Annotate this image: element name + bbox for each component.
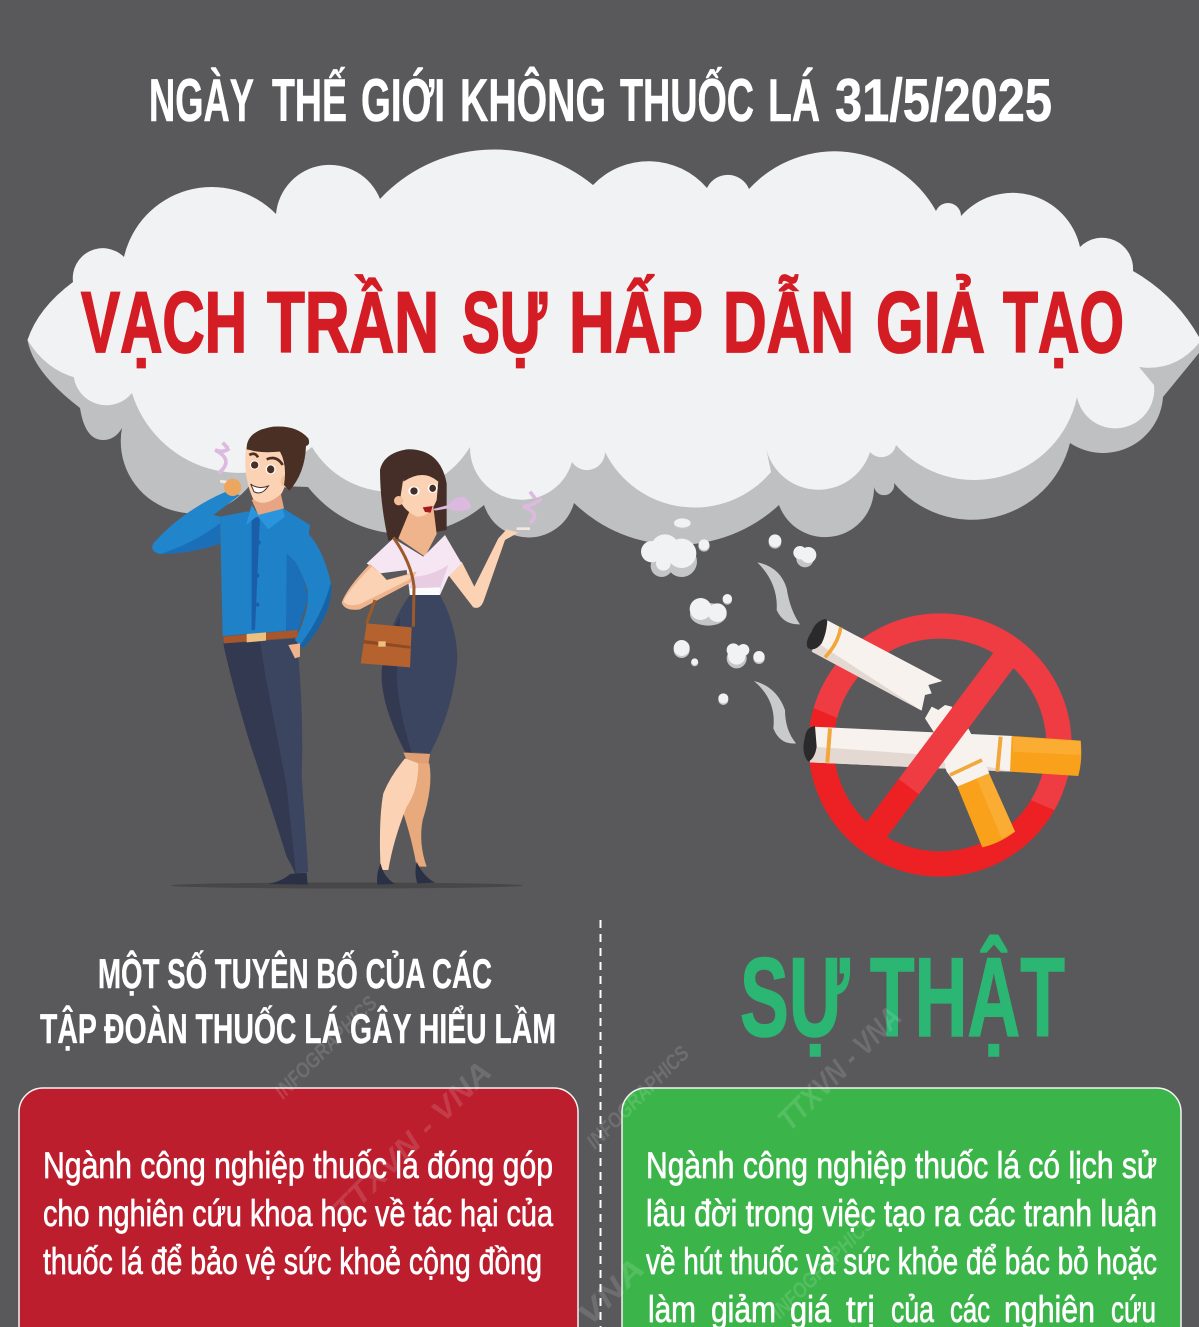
long cigarette [803,726,1081,776]
title: THUỐC [620,67,754,134]
watermarks: TTXVN - VNA [327,1055,498,1227]
left heading: MỘT SỐ TUYÊN BỐ CỦA CÁC [98,949,492,997]
main heading: GIẢ [876,275,985,371]
broken cigarette [807,619,942,711]
divider [600,920,602,1327]
smoke puffs [641,518,816,705]
third cigarette top [925,705,970,770]
left heading: TẬP ĐOÀN THUỐC LÁ GÂY HIỂU LẦM [40,1004,556,1052]
title: KHÔNG [460,67,606,134]
ground shadow [171,882,523,888]
watermarks: INFOGRAPHICS [270,992,382,1104]
panel: misleading claim [19,1088,578,1327]
panel: the truth [622,1088,1181,1327]
title: LÁ [768,67,820,134]
icon: no smoking ring [821,626,1059,864]
watermarks: TTXVN - VNA [772,1000,908,1137]
watermarks: INFOGRAPHICS [767,1212,879,1324]
main heading: TRẦN [267,275,439,371]
main heading: HẤP [569,275,703,371]
panel: misleading claim: cho nghiên cứu khoa học về tác hại của [43,1193,553,1234]
left heading [40,949,556,1052]
main heading: TẠO [1003,275,1124,371]
title: 31/5/2025 [835,67,1052,134]
main heading: DẪN [723,275,854,371]
illustration: man smoking [152,426,332,885]
panel: misleading claim: thuốc lá để bảo vệ sức khoẻ cộng đồng [43,1241,542,1282]
slash [875,658,1005,832]
cloud [28,150,1199,545]
title: NGÀY [149,67,254,134]
title [149,67,1052,134]
smoke wisps [754,562,800,743]
title: THẾ [272,67,347,134]
main heading: SỰ [462,275,547,371]
title: GIỚI [361,67,445,134]
illustration: woman smoking [342,449,542,885]
third cigarette filter [945,728,1015,847]
watermarks [270,992,908,1327]
panel: misleading claim: Ngành công nghiệp thuốc lá đóng góp [43,1145,553,1186]
illustration: smoke puffs and cigarettes [641,518,1081,864]
main heading: VẠCH [81,275,247,371]
watermarks: INFOGRAPHICS [582,1042,694,1154]
main heading [81,275,1124,371]
